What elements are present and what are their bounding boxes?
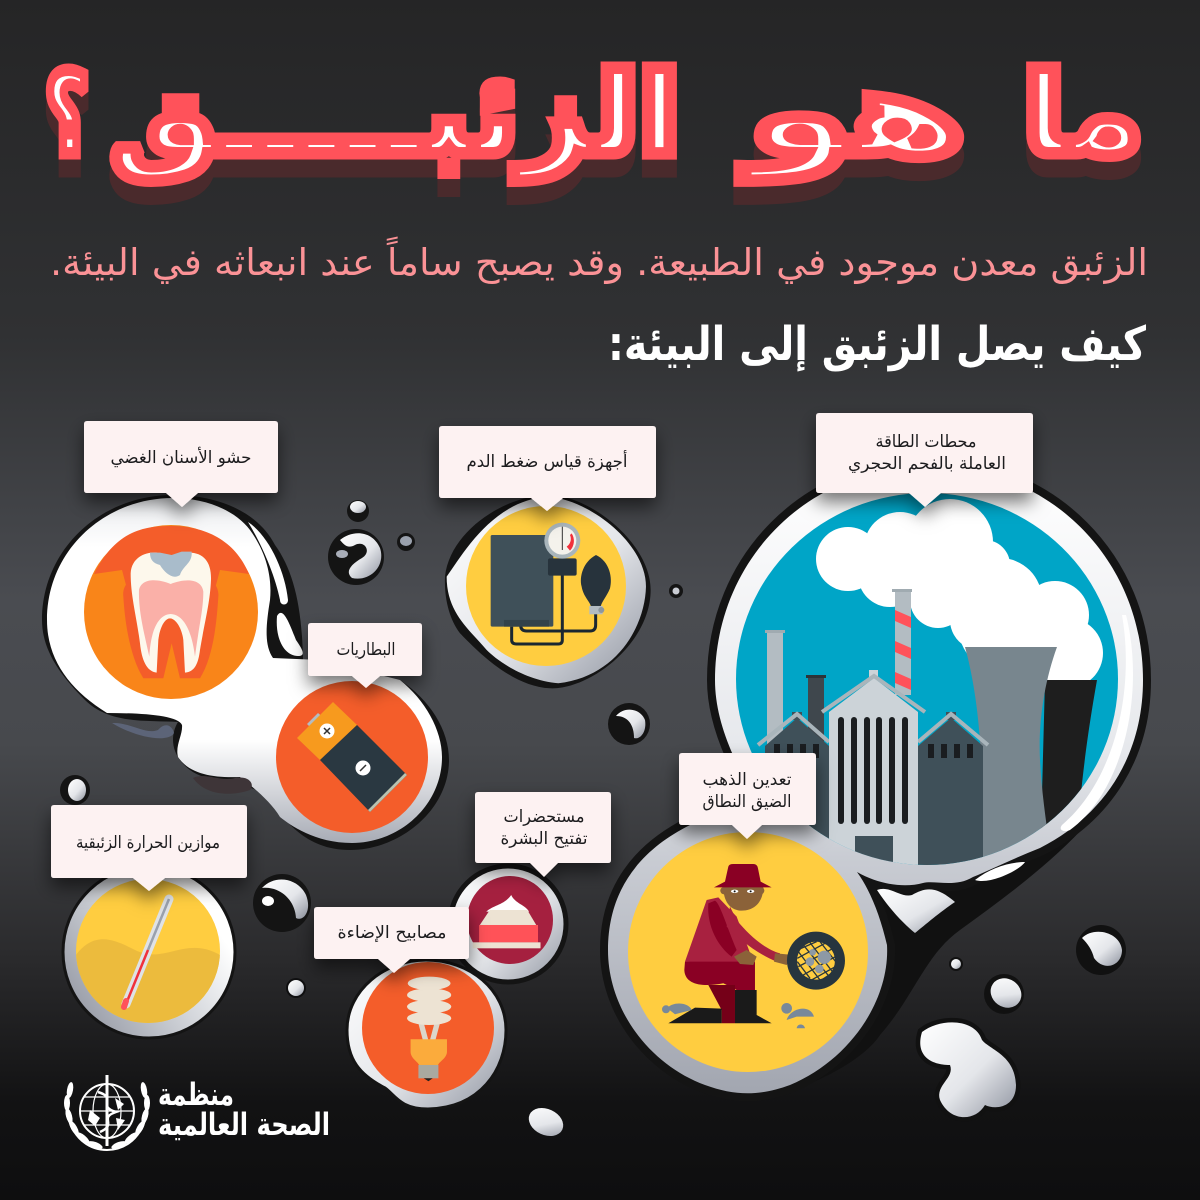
tooth disc	[84, 525, 258, 699]
silver mercury blob: plant and mining	[608, 466, 1150, 1097]
label: power plants: العاملة بالفحم الحجري	[848, 454, 1006, 474]
label: gold mining: الضيق النطاق	[702, 792, 792, 812]
icon: thermometer	[124, 899, 169, 1007]
title: ما	[1023, 68, 1143, 198]
title: ما	[1023, 50, 1143, 180]
battery disc	[276, 681, 428, 833]
mercury blob with highlights	[42, 495, 449, 850]
panel: coal power plant	[608, 413, 1150, 1097]
label: light bulbs	[314, 907, 469, 973]
panel: small-scale gold mining	[628, 753, 868, 1072]
panel: thermometers	[51, 805, 247, 1038]
grey cooling tower	[965, 647, 1057, 870]
title: الزئبـــــق	[110, 50, 680, 181]
icon: miner	[662, 864, 845, 1028]
yellow disc	[628, 832, 868, 1072]
mercury ring	[347, 960, 506, 1109]
label: batteries: البطاريات	[336, 640, 396, 660]
label: silver fillings: حشو الأسنان الغضي	[110, 447, 252, 468]
right building	[918, 712, 988, 870]
title: ؟	[45, 68, 89, 198]
yellow disc	[76, 879, 220, 1023]
title: هو	[742, 50, 964, 180]
label: skin products	[475, 792, 611, 877]
title	[45, 50, 1143, 199]
label: blood pressure: أجهزة قياس ضغط الدم	[466, 450, 628, 472]
icon: light bulb	[407, 977, 451, 1081]
label: gold mining: تعدين الذهب	[702, 770, 792, 790]
title: ؟	[45, 50, 89, 180]
yellow disc	[466, 506, 626, 666]
droplets	[60, 500, 1126, 1141]
title: الزئبـــــق	[110, 50, 680, 181]
maroon disc	[467, 876, 553, 964]
mercury blob	[445, 495, 651, 688]
icon: tooth	[123, 552, 218, 678]
logo text: الصحة العالمية	[158, 1107, 330, 1143]
title: ما	[1023, 50, 1143, 180]
label: silver fillings	[84, 421, 278, 507]
logo text	[158, 1077, 330, 1143]
panel: light bulbs	[314, 907, 506, 1109]
title: الزئبـــــق	[110, 68, 680, 199]
icon: cream jar	[473, 895, 541, 948]
title: ؟	[45, 50, 89, 180]
panel: blood pressure devices	[439, 426, 656, 688]
smoke cloud	[816, 499, 1103, 690]
icon: battery	[297, 702, 407, 812]
left building	[756, 711, 829, 838]
chimney dark	[808, 677, 824, 747]
title: هو	[742, 50, 964, 180]
label: blood pressure	[439, 426, 656, 511]
black cooling tower	[1041, 680, 1097, 828]
logo text: منظمة	[158, 1077, 234, 1113]
title: هو	[742, 68, 964, 198]
sky	[736, 493, 1118, 865]
logo: World Health Organization	[64, 1075, 330, 1151]
mercury ring	[450, 866, 566, 982]
mercury ring	[63, 866, 235, 1038]
label: batteries	[308, 623, 422, 688]
subtitle text: الزئبق معدن موجود في الطبيعة. وقد يصبح ساماً عند انبعاثه في البيئة.	[50, 236, 1148, 284]
icon: WHO emblem	[64, 1075, 150, 1151]
striped chimney	[892, 589, 912, 695]
main building	[822, 670, 925, 870]
label: skin products: مستحضرات	[504, 807, 584, 827]
label: gold mining	[679, 753, 816, 839]
orange disc	[362, 962, 494, 1094]
panel: skin-lightening products	[450, 792, 611, 982]
icon: blood pressure cuff	[491, 523, 611, 644]
label: thermometers: موازين الحرارة الزئبقية	[76, 833, 220, 853]
chimney left	[767, 632, 783, 752]
label: thermometers	[51, 805, 247, 891]
panel: tooth and batteries blob	[42, 421, 449, 850]
label: power plants	[816, 413, 1033, 507]
label: skin products: تفتيح البشرة	[500, 829, 588, 849]
label: power plants: محطات الطاقة	[876, 432, 976, 452]
label: light bulbs: مصابيح الإضاءة	[338, 923, 446, 943]
